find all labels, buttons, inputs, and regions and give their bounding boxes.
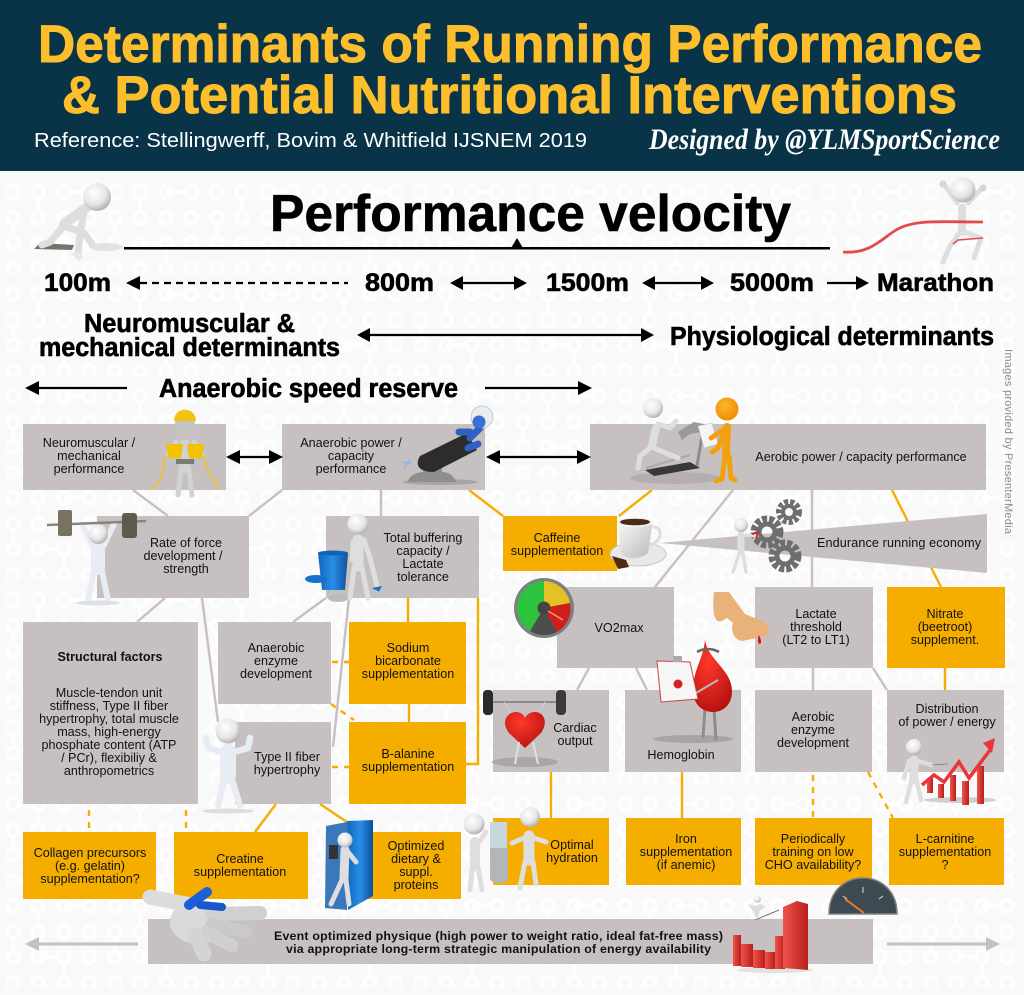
- panel: sodium bicarbonate: Sodium: [387, 641, 429, 655]
- panel: lactate threshold: [755, 587, 873, 668]
- panel: anaerobic performance: [282, 424, 485, 490]
- reference line: Reference: Stellingwerff, Bovim & Whitfield IJSNEM 2019: [34, 129, 587, 152]
- panel: creatine: Creatine: [216, 852, 264, 866]
- icon: coffee cup: [610, 517, 666, 569]
- distances row: Marathon: [877, 269, 994, 297]
- panel: aerobic enzyme development: Aerobic: [792, 710, 834, 724]
- panel: aerobic enzyme development: development: [777, 736, 850, 750]
- panel: optimized proteins: [365, 832, 461, 899]
- panel: L-carnitine: supplementation: [899, 845, 991, 859]
- panel: aerobic enzyme development: enzyme: [791, 723, 835, 737]
- icon: red bar chart with tightrope walker: [733, 895, 813, 973]
- panel: iron supplementation: (if anemic): [657, 858, 715, 872]
- panel: VO2max: [557, 587, 674, 668]
- panel: total buffering: Lactate: [402, 557, 444, 571]
- panel: event optimized physique: via appropriate long-term strategic manipulation of energy availability: [286, 942, 711, 956]
- panel: total buffering: Total buffering: [384, 531, 462, 545]
- panel: optimized proteins: Optimized: [388, 839, 444, 853]
- panel: cardiac output: [493, 690, 609, 772]
- panel: anaerobic performance: Anaerobic power /: [300, 436, 402, 450]
- panel: VO2max: VO2max: [594, 621, 644, 635]
- title: [38, 15, 982, 125]
- panel: nitrate: (beetroot): [918, 620, 972, 634]
- connectors: grey determinant links: [133, 490, 887, 747]
- distances row: 800m: [365, 269, 434, 297]
- panel: creatine: [174, 832, 308, 899]
- icon: hand with blue pills: [150, 892, 260, 954]
- icon: water cooler and figures: [464, 807, 546, 890]
- panel: aerobic enzyme development: [755, 690, 872, 772]
- panel: total buffering: capacity /: [396, 544, 450, 558]
- icon: flexing figure: [202, 718, 254, 814]
- panel: hemoglobin: [625, 690, 741, 772]
- panel: structural factors: stiffness, Type II fiber: [50, 699, 168, 713]
- panel: low CHO training: CHO availability?: [765, 858, 861, 872]
- panel: sodium bicarbonate: [349, 622, 466, 704]
- panel: collagen precursors: Collagen precursors: [34, 846, 146, 860]
- heading: performance velocity: Performance velocity: [270, 185, 791, 243]
- arrow: lower left: [25, 937, 138, 951]
- panel: structural factors: hypertrophy, total muscle: [39, 712, 179, 726]
- panel: anaerobic enzyme development: development: [240, 667, 313, 681]
- panel: optimized proteins: proteins: [394, 878, 438, 892]
- panel: nitrate: Nitrate: [926, 607, 964, 621]
- arrow: anaerobic to aerobic: [486, 450, 591, 464]
- panel: collagen precursors: supplementation?: [40, 872, 140, 886]
- panel: rate of force: development /: [143, 549, 223, 563]
- icon: figure with gears: [733, 502, 799, 572]
- panel: anaerobic performance: performance: [316, 462, 386, 476]
- panel: creatine: supplementation: [194, 865, 286, 879]
- panel: caffeine supplementation: Caffeine: [534, 531, 580, 545]
- panel: endurance running economy: Endurance running economy: [817, 536, 982, 550]
- panel: caffeine supplementation: supplementation: [511, 544, 603, 558]
- panel: rate of force: Rate of force: [150, 536, 222, 550]
- panel: cardiac output: output: [557, 734, 593, 748]
- panel: sodium bicarbonate: bicarbonate: [375, 654, 441, 668]
- arrow: determinants spectrum: [357, 328, 654, 342]
- panel: caffeine supplementation: [503, 516, 617, 571]
- image credit: Images provided by PresenterMedia: [1002, 349, 1014, 535]
- panel: total buffering: tolerance: [397, 570, 449, 584]
- panel: neuromuscular performance: [23, 424, 226, 490]
- panel: type II fiber hypertrophy: hypertrophy: [254, 763, 321, 777]
- arrow: neuromuscular to anaerobic: [226, 450, 283, 464]
- panel: event optimized physique: Event optimized physique (high power to weight ratio, ideal fat-free mass): [274, 929, 723, 943]
- icon: fridge with figure: [325, 820, 373, 910]
- panel: optimal hydration: Optimal: [550, 838, 594, 852]
- panel: iron supplementation: supplementation: [640, 845, 732, 859]
- panel: aerobic performance: [590, 424, 986, 490]
- panel: optimized proteins: dietary &: [391, 852, 441, 866]
- panel: anaerobic enzyme development: enzyme: [254, 654, 298, 668]
- icon: heart lifting barbell: [483, 690, 566, 767]
- panel: lactate threshold: threshold: [790, 620, 842, 634]
- panel: collagen precursors: (e.g. gelatin): [55, 859, 125, 873]
- panel: optimal hydration: [493, 818, 609, 885]
- heading: anaerobic speed reserve with arrows: Anaerobic speed reserve: [159, 375, 458, 403]
- heading: neuromuscular and mechanical determinants: [39, 310, 340, 362]
- panel: anaerobic enzyme development: Anaerobic: [248, 641, 304, 655]
- panel: B-alanine: B-alanine: [381, 747, 435, 761]
- arrows between distances: [126, 276, 869, 290]
- distances row: [44, 269, 994, 297]
- header banner: [0, 0, 1024, 171]
- panel: distribution of power: of power / energy: [898, 715, 996, 729]
- panel: rate of force: strength: [163, 562, 209, 576]
- heading: physiological determinants: Physiological determinants: [670, 323, 994, 351]
- panel: structural factors: / PCr), flexibiliy &: [61, 751, 158, 765]
- panel: lactate threshold: Lactate: [795, 607, 837, 621]
- title: & Potential Nutritional Interventions: [62, 66, 957, 125]
- panel: nitrate: [887, 587, 1005, 668]
- panel: structural factors: mass, high-energy: [57, 725, 161, 739]
- panel: type II fiber hypertrophy: [235, 722, 331, 804]
- arrow: lower right: [887, 937, 1000, 951]
- heading: neuromuscular and mechanical determinants: mechanical determinants: [39, 334, 340, 362]
- velocity axis line: [124, 238, 830, 250]
- icon: janitor with blue bin: [305, 514, 382, 602]
- icon: weightlifter: [47, 510, 146, 606]
- panel: low CHO training: training on low: [772, 845, 855, 859]
- panel: rate of force: [97, 516, 249, 598]
- panel: distribution of power: [887, 690, 1004, 772]
- panel: neuromuscular performance: Neuromuscular /: [43, 436, 136, 450]
- icon: blue figure on cannon: [402, 406, 493, 485]
- panel: structural factors: [23, 622, 198, 804]
- panel: collagen precursors: [23, 832, 156, 899]
- icon: presenter with rising chart: [904, 738, 996, 805]
- panel: aerobic performance: Aerobic power / capacity performance: [755, 450, 967, 464]
- panel: structural factors: anthropometrics: [64, 764, 154, 778]
- panel: optimal hydration: hydration: [546, 851, 598, 865]
- icon: blood drop with clipboard: [653, 640, 733, 743]
- icon: treadmill runner and orange coach: [630, 398, 738, 484]
- panel: low CHO training: Periodically: [781, 832, 846, 846]
- connectors: yellow nutrition links: [89, 490, 945, 832]
- distances row: 5000m: [730, 269, 814, 297]
- title: Determinants of Running Performance: [38, 15, 982, 74]
- panel: anaerobic performance: capacity: [328, 449, 375, 463]
- icon: VO2max gauge: [514, 578, 574, 638]
- panel: low CHO training: [755, 818, 872, 885]
- panel: iron supplementation: Iron: [675, 832, 697, 846]
- panel: total buffering: [326, 516, 479, 598]
- panel: structural factors: Muscle-tendon unit: [56, 686, 163, 700]
- panel: cardiac output: Cardiac: [553, 721, 597, 735]
- heading: neuromuscular and mechanical determinants: Neuromuscular &: [84, 310, 295, 338]
- icon: finisher with red tape: [843, 178, 986, 262]
- panel: nitrate: supplement.: [911, 633, 979, 647]
- icon: fuel gauge: [829, 878, 897, 914]
- icon: worker with cables: [152, 410, 220, 495]
- panel: event optimized physique: [148, 919, 873, 964]
- icon: finger with blood drop: [713, 592, 769, 644]
- panel: distribution of power: Distribution: [916, 702, 978, 716]
- panel: sodium bicarbonate: supplementation: [362, 667, 454, 681]
- panel: endurance running economy: [660, 514, 987, 573]
- icon: runner in start position: [34, 183, 123, 261]
- panel: iron supplementation: [626, 818, 741, 885]
- panel: lactate threshold: (LT2 to LT1): [782, 633, 850, 647]
- distances row: 100m: [44, 269, 111, 297]
- panel: type II fiber hypertrophy: Type II fiber: [254, 750, 320, 764]
- panel: neuromuscular performance: performance: [54, 462, 124, 476]
- panel: B-alanine: supplementation: [362, 760, 454, 774]
- panel: L-carnitine: [889, 818, 1004, 885]
- heading: anaerobic speed reserve with arrows: [25, 375, 592, 403]
- distances row: 1500m: [546, 269, 629, 297]
- panel: anaerobic enzyme development: [218, 622, 331, 704]
- panel: structural factors: Structural factors: [58, 650, 162, 664]
- panel: optimized proteins: suppl.: [399, 865, 433, 879]
- panel: structural factors: phosphate content (ATP: [42, 738, 176, 752]
- panel: hemoglobin: Hemoglobin: [647, 748, 715, 762]
- panel: B-alanine: [349, 722, 466, 804]
- panel: L-carnitine: ?: [941, 858, 949, 872]
- panel: neuromuscular performance: mechanical: [57, 449, 121, 463]
- panel: L-carnitine: L-carnitine: [916, 832, 974, 846]
